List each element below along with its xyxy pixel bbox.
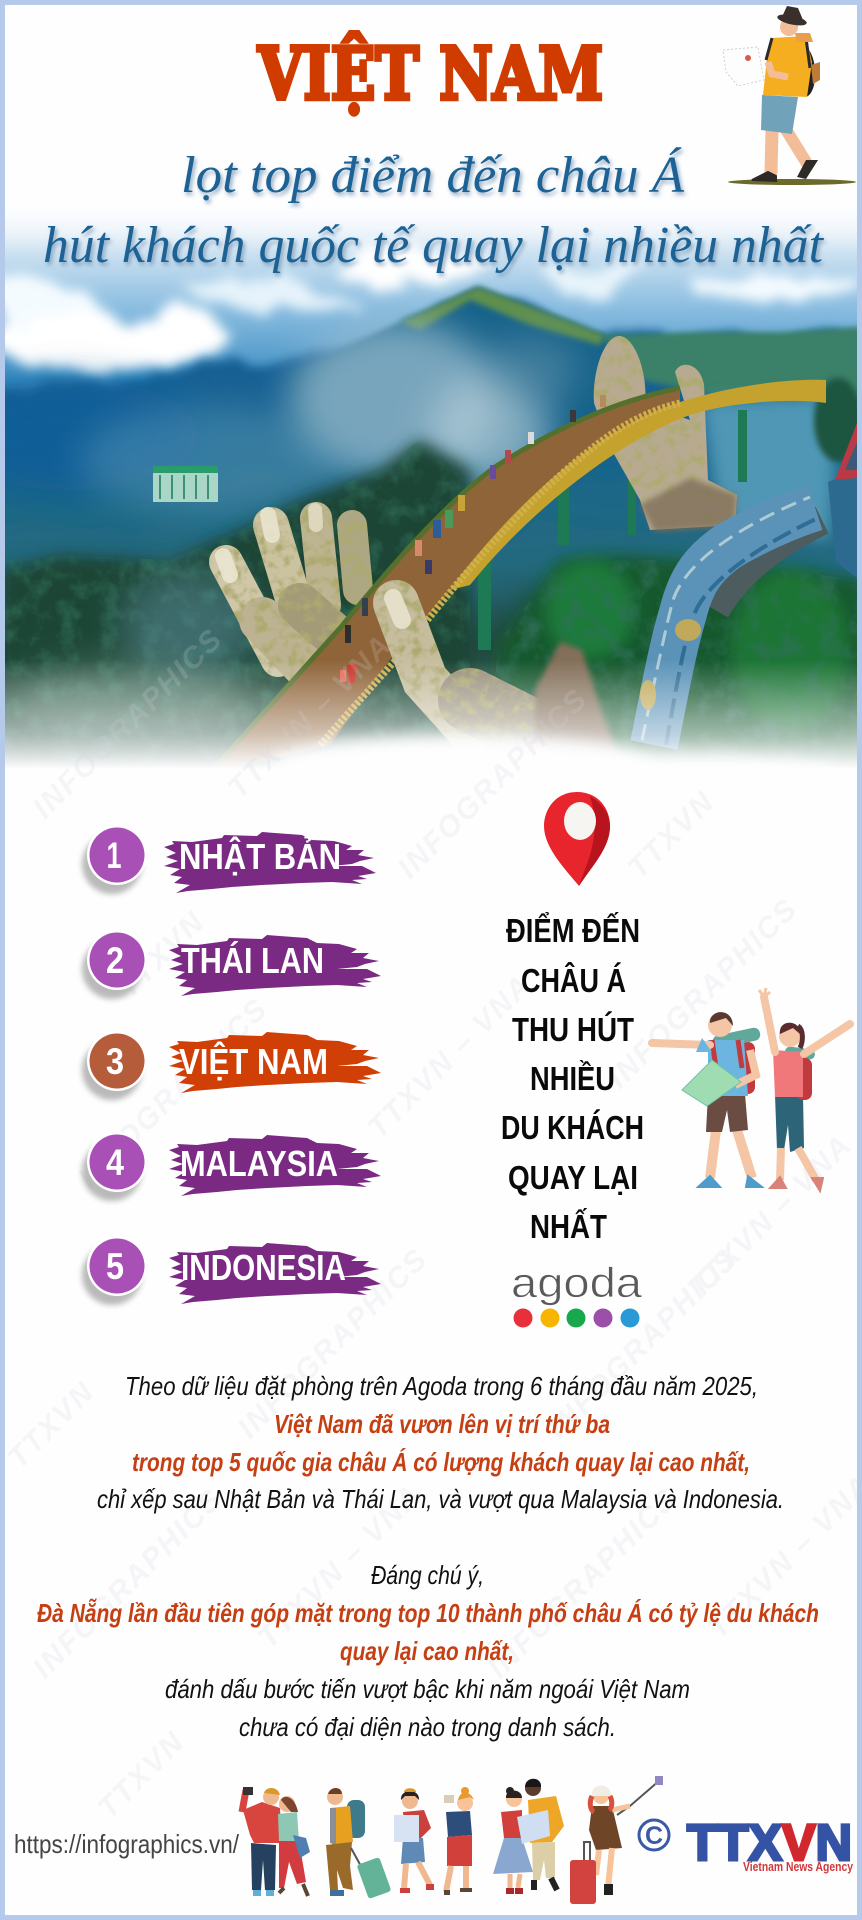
watermarks: INFOGRAPHICS bbox=[542, 1242, 745, 1445]
watermarks: TTXVN – VNA bbox=[362, 968, 538, 1145]
hero photo: Golden Bridge at Ba Na Hills bbox=[5, 221, 857, 766]
text block: Da Nang paragraph: đánh dấu bước tiến vượt bậc khi năm ngoái Việt Nam bbox=[165, 1674, 690, 1704]
rank 3: Vietnam: VIỆT NAM bbox=[179, 1040, 328, 1082]
traveller 8: selfie with red suitcase bbox=[570, 1776, 663, 1904]
subtitle line 1: lọt top điểm đến châu Á bbox=[181, 146, 684, 204]
source url: https://infographics.vn/ bbox=[14, 1829, 240, 1859]
logo: agoda bbox=[511, 1259, 643, 1328]
watermarks: TTXVN – VNA bbox=[252, 1478, 428, 1655]
icon: location pin bbox=[544, 792, 610, 886]
visitors on bridge bbox=[340, 395, 606, 683]
text block: Agoda data paragraph: Theo dữ liệu đặt phòng trên Agoda trong 6 tháng đầu năm 2025, bbox=[125, 1371, 758, 1401]
watermarks: TTXVN bbox=[112, 905, 212, 1005]
forest masses bbox=[0, 440, 862, 780]
copyright symbol bbox=[639, 1820, 669, 1850]
heading: destinations block: NHẤT bbox=[530, 1208, 607, 1245]
man bbox=[652, 1012, 762, 1187]
rank 2: Thailand: THÁI LAN bbox=[181, 940, 324, 981]
distant tree at bridge end bbox=[814, 378, 862, 462]
rank 1: Japan: 1 bbox=[106, 835, 122, 876]
traveller 3: backpacker with suitcase bbox=[326, 1788, 391, 1899]
heading: destinations block: CHÂU Á bbox=[521, 962, 626, 999]
heading: destinations block bbox=[501, 912, 644, 1245]
copyright symbol: C bbox=[645, 1822, 663, 1850]
illustration: group of travellers bbox=[242, 1776, 663, 1904]
watermarks: INFOGRAPHICS bbox=[232, 1242, 435, 1445]
watermarks: TTXVN bbox=[2, 1375, 102, 1475]
bridge deck and rails bbox=[208, 380, 826, 775]
watermarks: INFOGRAPHICS bbox=[392, 682, 595, 885]
text block: Da Nang paragraph: chưa có đại diện nào trong danh sách. bbox=[239, 1712, 616, 1742]
heading: destinations block: ĐIỂM ĐẾN bbox=[506, 912, 640, 949]
rank 5: Indonesia bbox=[82, 1236, 381, 1305]
subtitle line 2: hút khách quốc tế quay lại nhiều nhất bbox=[43, 217, 825, 274]
heading: destinations block: THU HÚT bbox=[512, 1011, 634, 1048]
watermarks: TTXVN – VNA bbox=[682, 1128, 858, 1305]
heading: destinations block: QUAY LẠI bbox=[508, 1159, 638, 1196]
woman bbox=[759, 988, 850, 1191]
lower stone hand thumb and rock bbox=[396, 603, 560, 745]
rank 1: Japan bbox=[82, 825, 376, 894]
watermarks: TTXVN – VNA bbox=[222, 628, 398, 805]
illustration: tourist couple with map bbox=[652, 988, 850, 1191]
rank 4: Malaysia bbox=[82, 1132, 381, 1201]
title: VIỆT NAM bbox=[257, 31, 603, 116]
traveller 5: woman in red shorts bbox=[444, 1787, 474, 1895]
logo: agoda: agoda bbox=[511, 1259, 643, 1306]
text block: Da Nang paragraph bbox=[37, 1560, 819, 1742]
rank 2: Thailand bbox=[82, 930, 381, 999]
icon: hiker with map bbox=[723, 6, 856, 185]
watermarks: INFOGRAPHICS bbox=[72, 992, 275, 1195]
rank 1: Japan: NHẬT BẢN bbox=[179, 835, 341, 877]
heading: destinations block: DU KHÁCH bbox=[501, 1109, 644, 1146]
logo: TTXVN Vietnam News Agency: TTXVN bbox=[687, 1814, 852, 1871]
green pillars bbox=[478, 410, 747, 650]
rank 2: Thailand: 2 bbox=[106, 940, 124, 981]
traveller 4: woman with map bbox=[394, 1788, 434, 1893]
watermarks bbox=[2, 622, 862, 1825]
left stone hand bbox=[226, 518, 358, 670]
watermarks: INFOGRAPHICS bbox=[602, 892, 805, 1095]
text block: Agoda data paragraph: Việt Nam đã vươn lên vị trí thứ ba bbox=[274, 1409, 610, 1439]
right-side building bbox=[828, 423, 857, 578]
rank 3: Vietnam bbox=[82, 1031, 381, 1100]
text block: Da Nang paragraph: Đáng chú ý, bbox=[371, 1560, 484, 1590]
rank 4: Malaysia: MALAYSIA bbox=[180, 1143, 338, 1184]
rank 3: Vietnam: 3 bbox=[106, 1041, 124, 1082]
rank 5: Indonesia: INDONESIA bbox=[181, 1247, 346, 1288]
traveller 6: woman in blue skirt bbox=[493, 1787, 533, 1894]
heading: destinations block: NHIỀU bbox=[530, 1060, 615, 1097]
watermarks: INFOGRAPHICS bbox=[482, 1482, 685, 1685]
text block: Agoda data paragraph bbox=[97, 1371, 784, 1514]
cloud foreground bbox=[274, 724, 645, 766]
text block: Da Nang paragraph: quay lại cao nhất, bbox=[340, 1636, 514, 1666]
traveller 7: man with map bbox=[517, 1779, 564, 1890]
traveller 1: photographer bbox=[242, 1787, 282, 1896]
watermarks: INFOGRAPHICS bbox=[27, 1482, 230, 1685]
watermarks: TTXVN bbox=[92, 1725, 192, 1825]
rank 4: Malaysia: 4 bbox=[106, 1142, 124, 1183]
traveller 2: woman with tote bbox=[278, 1796, 310, 1896]
ranking list bbox=[82, 825, 381, 1305]
green hotel building bbox=[153, 466, 218, 502]
serpent path bbox=[640, 497, 822, 745]
upper stone hand bbox=[594, 336, 737, 530]
rank 5: Indonesia: 5 bbox=[106, 1246, 124, 1287]
watermarks: INFOGRAPHICS bbox=[27, 622, 230, 825]
watermarks: TTXVN bbox=[622, 785, 722, 885]
